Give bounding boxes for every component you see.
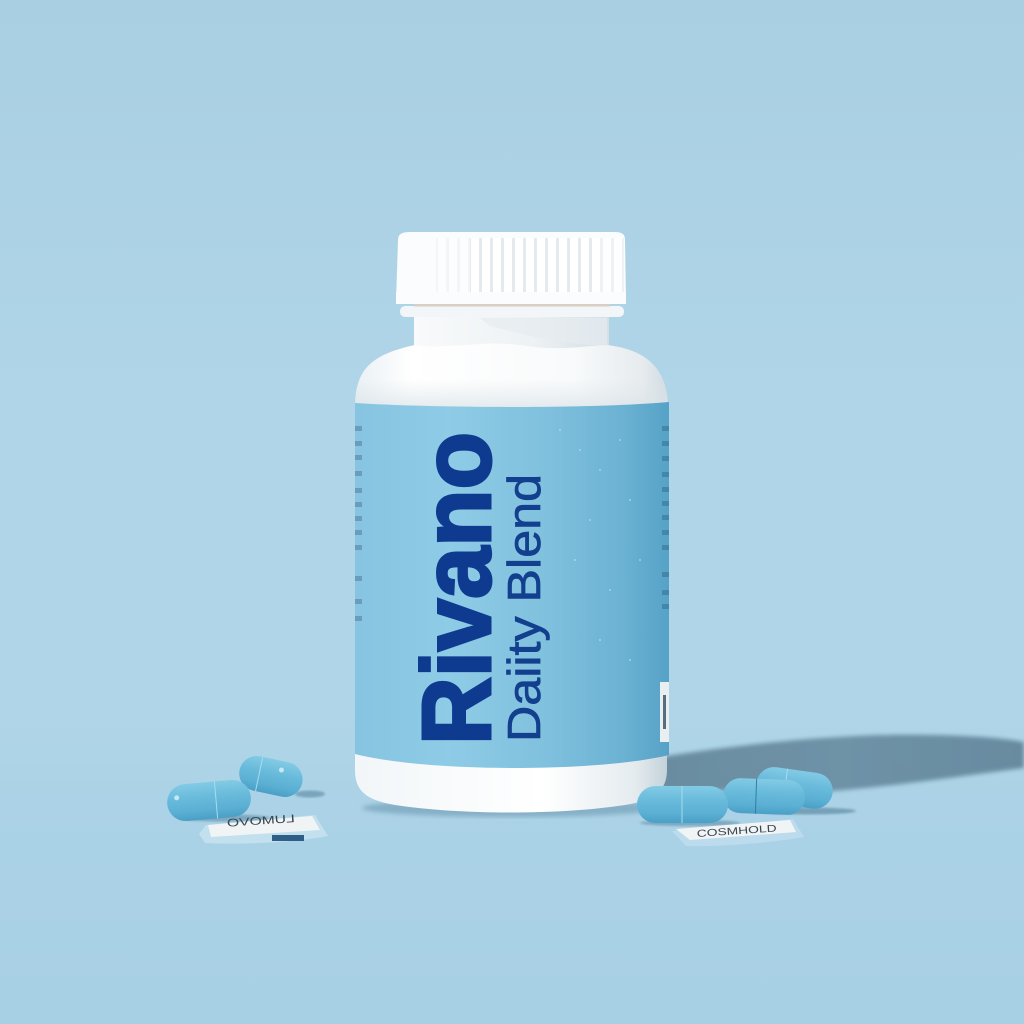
label fine print left — [355, 426, 362, 621]
capsule shadow — [760, 808, 856, 814]
capsule back — [236, 753, 306, 800]
shoulder shading — [355, 344, 668, 408]
product name: Daiity Blend — [498, 474, 550, 742]
capsule back — [754, 765, 835, 811]
capsule front — [166, 778, 252, 823]
bottle contact shadow — [362, 799, 662, 817]
right capsules — [637, 765, 856, 826]
neck shading — [480, 318, 607, 346]
capsule shadow — [295, 790, 325, 798]
capsule seam — [681, 786, 683, 823]
barcode — [660, 682, 669, 742]
label speckle — [559, 429, 641, 661]
left capsules — [166, 753, 325, 823]
left blister tag: LUMOVO — [226, 813, 295, 830]
capsule shadow — [180, 814, 270, 822]
label — [355, 402, 669, 768]
bottle neck — [414, 314, 609, 356]
capsule middle — [722, 778, 806, 815]
brand name: Rivano — [402, 432, 511, 745]
bottle cast shadow — [660, 735, 1024, 792]
cap — [396, 232, 626, 306]
capsule front — [637, 786, 728, 823]
collar ring — [400, 306, 624, 317]
bottle base — [355, 750, 667, 812]
bottle — [355, 232, 669, 812]
label fine print right — [662, 426, 669, 609]
bottle shoulder — [355, 344, 668, 408]
right blister tag: COSMHOLD — [696, 823, 777, 840]
capsule shadow — [640, 820, 740, 826]
right blister tag — [672, 819, 804, 846]
left blister tag — [199, 813, 328, 844]
